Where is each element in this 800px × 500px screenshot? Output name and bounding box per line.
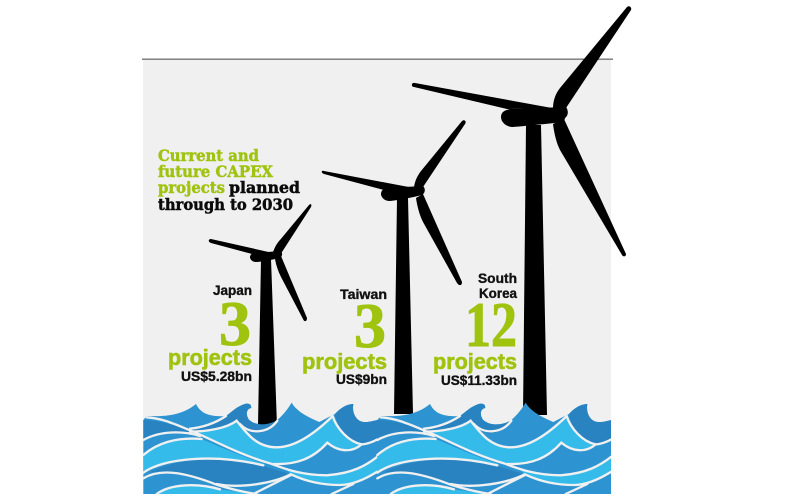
heading: Current and [158,146,259,165]
label: Japan [168,282,252,384]
label: South Korea [433,270,517,388]
label: South Korea: South [478,270,517,286]
label: Taiwan: Taiwan [340,286,387,302]
label: Taiwan: projects [302,349,387,374]
label: Taiwan [302,286,387,387]
heading: through to 2030 [158,195,293,214]
turbine: South Korea [412,6,631,415]
panel: grey background [143,60,611,494]
label: Taiwan: 3 [354,290,386,361]
heading: future CAPEX [158,162,274,181]
sea waves [143,403,612,497]
label: Taiwan: US$9bn [336,371,387,387]
label: Japan: 3 [219,288,251,359]
turbine: Japan [209,204,311,426]
label: South Korea: Korea [479,285,517,301]
heading: planned [229,178,300,197]
label: Japan: US$5.28bn [181,368,252,384]
label: Japan: projects [168,345,252,370]
label: South Korea: projects [433,349,517,374]
label: Japan: Japan [213,282,252,298]
label: South Korea: 12 [465,289,517,360]
heading [158,146,300,214]
label: South Korea: US$11.33bn [441,372,517,388]
top rule line [142,58,613,60]
turbine: Taiwan [322,120,466,414]
heading: projects [158,178,225,197]
